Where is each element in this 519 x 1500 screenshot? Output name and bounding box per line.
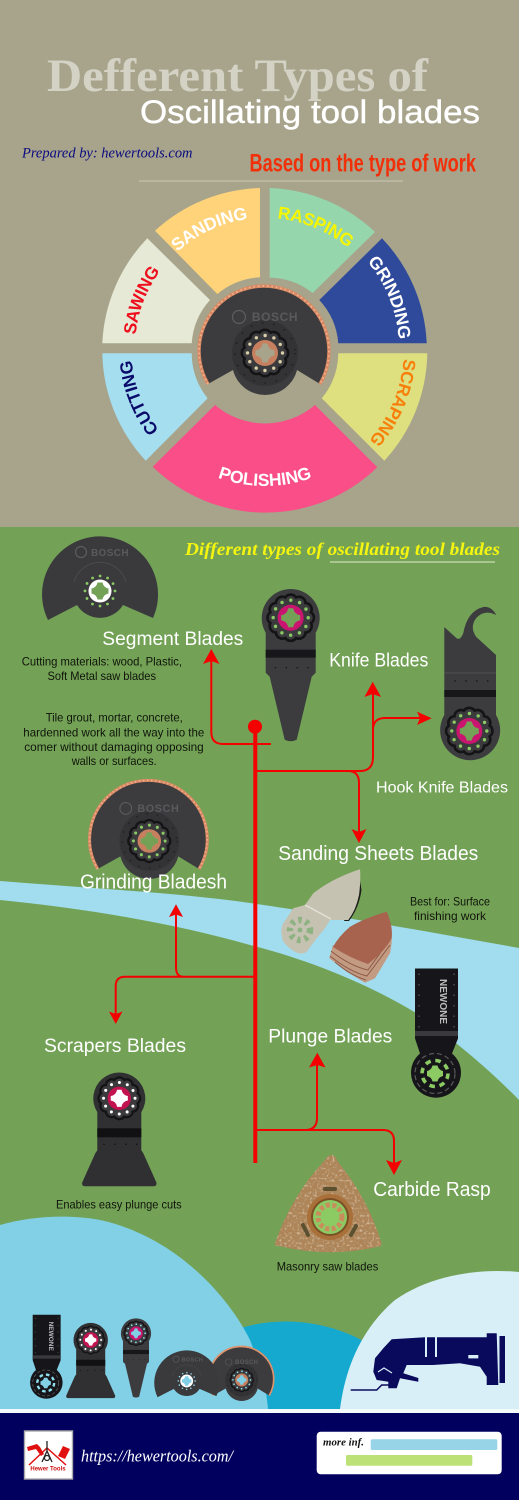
note: tile grout: comer without damaging opposing <box>24 740 204 754</box>
note: best for: finishing work <box>414 909 487 923</box>
label: plunge blades: Plunge Blades <box>268 1027 392 1048</box>
segment: grinding <box>319 238 427 344</box>
label: scrapers blades: Scrapers Blades <box>44 1036 186 1057</box>
blade: grinding <box>90 780 207 879</box>
segment: scraping <box>322 353 428 461</box>
segment: polishing: POLISHING <box>218 466 311 486</box>
background blob: light blue <box>0 1217 268 1409</box>
arrow: to knife blades <box>255 692 373 771</box>
note: tile grout: hardenned work all the way into the <box>23 726 205 740</box>
blade: knife <box>262 589 320 741</box>
segment: sawing <box>102 238 210 344</box>
panel: blade types background <box>0 527 519 1410</box>
logo: Hewer Tools <box>30 1466 66 1472</box>
mini plunge blade <box>30 1315 63 1399</box>
mini segment blade <box>154 1350 219 1397</box>
note: tile grout <box>23 711 205 768</box>
note: cutting materials: Cutting materials: wood, Plastic, <box>22 655 182 669</box>
label: sanding sheets blades: Sanding Sheets Blades <box>278 843 478 865</box>
subtitle: Oscillating tool blades: Oscillating tool blades <box>140 94 480 130</box>
label: segment blades: Segment Blades <box>102 629 243 650</box>
note: enables plunge cuts: Enables easy plunge cuts <box>56 1197 182 1211</box>
segment: cutting: CUTTING <box>120 361 157 434</box>
label: grinding blades: Grinding Bladesh <box>80 871 227 893</box>
blade: carbide rasp <box>275 1155 382 1252</box>
stack of sanding sheets <box>329 912 392 983</box>
panel: header and wheel background <box>0 0 519 527</box>
background blob: pale blue <box>340 1271 519 1409</box>
section heading: Different types of oscillating tool blades <box>184 539 500 559</box>
more info card <box>317 1432 502 1474</box>
note: best for <box>410 895 490 923</box>
blade: hook knife <box>440 607 500 760</box>
arrow: to grinding <box>176 912 183 977</box>
icon: central grinding blade <box>199 286 329 395</box>
arrow: to plunge <box>255 1062 317 1130</box>
segment: sawing: SAWING <box>124 266 158 334</box>
segment: sanding <box>155 188 260 294</box>
arrow: to hook knife blades <box>373 718 425 730</box>
footer panel <box>0 1413 519 1500</box>
metal sanding plate <box>281 869 362 953</box>
blade: scraper <box>82 1072 156 1186</box>
chart: wheel of work types <box>102 188 428 513</box>
segment: rasping <box>270 188 375 293</box>
more inf label: more inf. <box>323 1438 364 1449</box>
arrowheads and trunk dot <box>109 649 432 1175</box>
note: best for: Best for: Surface <box>410 895 490 909</box>
note: tile grout: Tile grout, mortar, concrete, <box>46 711 183 725</box>
segment: rasping: RASPING <box>278 206 353 246</box>
green bar <box>346 1455 472 1466</box>
mini grinding blade <box>209 1346 274 1401</box>
segment: cutting <box>102 353 208 461</box>
blade: segment <box>42 536 158 620</box>
note: masonry saw blades: Masonry saw blades <box>277 1260 378 1274</box>
segment: grinding: GRINDING <box>370 256 410 338</box>
mini scraper blade <box>66 1323 115 1398</box>
icon: oscillating tool silhouette <box>351 1333 505 1390</box>
segment: scraping: SCRAPING <box>371 360 416 446</box>
credit line: Prepared by: hewertools.com <box>21 146 193 162</box>
flow arrows <box>116 660 425 1165</box>
white divider <box>0 1409 519 1413</box>
label: hook knife blades: Hook Knife Blades <box>376 780 508 797</box>
segment: polishing <box>152 405 378 513</box>
note: cutting materials <box>22 655 182 683</box>
label: knife blades: Knife Blades <box>329 651 428 672</box>
decorative river band <box>0 881 519 1100</box>
note: cutting materials: Soft Metal saw blades <box>48 669 156 683</box>
footer url: https://hewertools.com/ <box>81 1447 235 1466</box>
blade: plunge <box>411 968 461 1098</box>
blue bar <box>371 1439 497 1450</box>
arrow: to scrapers <box>116 977 255 1016</box>
blade lineup <box>30 1315 274 1401</box>
arrow: to segment blades <box>211 660 271 744</box>
note: tile grout: walls or surfaces. <box>71 754 157 768</box>
arrow: trunk <box>253 726 257 1163</box>
segment: sanding: SANDING <box>172 208 246 250</box>
label: carbide rasp: Carbide Rasp <box>373 1179 491 1201</box>
background blob: teal <box>235 1321 365 1409</box>
title: Defferent Types of: Defferent Types of <box>47 50 429 102</box>
mini knife blade <box>121 1318 151 1398</box>
logo <box>24 1431 72 1479</box>
arrow: to carbide rasp <box>300 1130 394 1165</box>
icon: sanding sheets <box>281 869 392 983</box>
arrow: to sanding sheets <box>348 771 359 835</box>
